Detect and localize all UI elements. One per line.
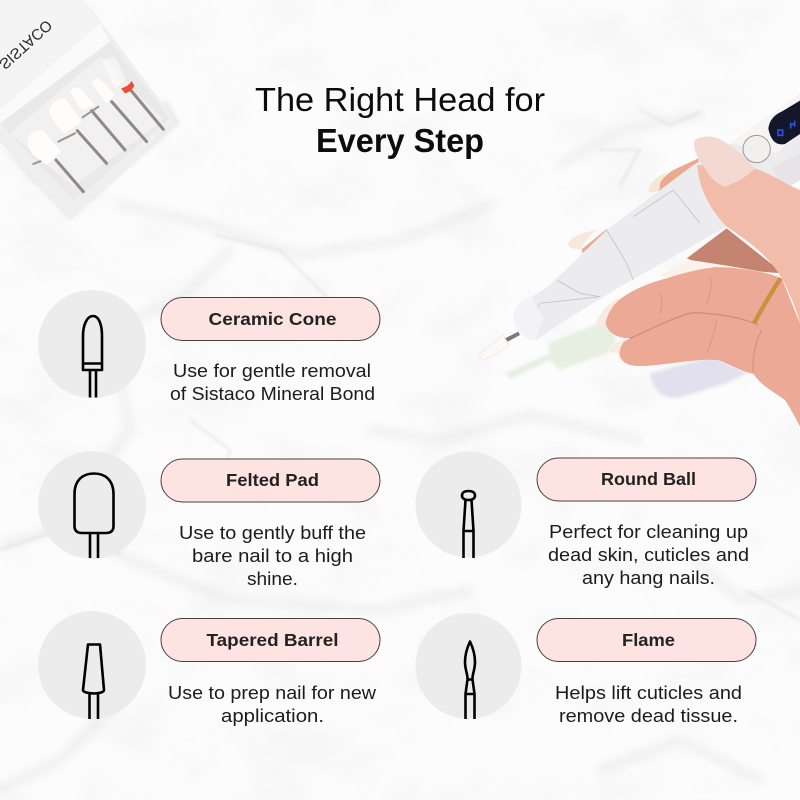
product case with drill bits — [0, 0, 180, 220]
description: Use for gentle removal — [173, 360, 371, 381]
knuckle creases — [630, 277, 762, 373]
description: Helps lift cuticles and — [555, 682, 742, 703]
description: dead skin, cuticles and — [548, 544, 749, 565]
cast shadows — [505, 320, 747, 398]
description: application. — [221, 705, 324, 726]
item: Felted Pad — [38, 451, 380, 589]
finger nails — [595, 297, 622, 327]
thumb nail — [694, 136, 755, 187]
description: Perfect for cleaning up — [549, 521, 748, 542]
fingers and back of hand — [605, 267, 800, 427]
pill: Felted Pad — [161, 459, 380, 502]
pill: Ceramic Cone: Ceramic Cone — [208, 309, 337, 329]
icon: round ball — [416, 452, 522, 558]
description: any hang nails. — [582, 567, 715, 588]
description: shine. — [247, 568, 298, 589]
icon: felted pad — [38, 451, 146, 559]
back fingers — [657, 158, 702, 192]
description: Use to prep nail for new — [168, 682, 377, 703]
wedding ring — [754, 278, 781, 323]
icon: ceramic cone — [38, 290, 146, 398]
pill: Flame: Flame — [622, 630, 675, 650]
red tipped bit — [121, 81, 134, 93]
item: Tapered Barrel — [38, 611, 380, 726]
item: Flame — [416, 613, 756, 726]
pen button — [743, 135, 770, 163]
pill: Tapered Barrel: Tapered Barrel — [206, 630, 338, 650]
description: Use to gently buff the — [179, 522, 366, 543]
pill: Flame — [537, 618, 756, 662]
case body — [0, 0, 175, 217]
description — [555, 682, 742, 726]
pill: Tapered Barrel — [161, 618, 380, 662]
description — [170, 360, 375, 404]
palm shadow — [687, 228, 783, 273]
pill: Felted Pad: Felted Pad — [226, 470, 319, 490]
icon: flame — [416, 613, 522, 719]
white bit heads — [28, 57, 126, 165]
case shadow — [0, 100, 180, 220]
description — [548, 521, 749, 588]
pen body — [513, 93, 800, 340]
thumb — [697, 165, 800, 323]
description: of Sistaco Mineral Bond — [170, 383, 375, 404]
icon: tapered barrel — [38, 611, 146, 719]
title: The Right Head for — [255, 81, 545, 118]
pill: Ceramic Cone — [161, 298, 380, 340]
drill bit — [505, 332, 520, 342]
description — [168, 682, 377, 726]
hand holding nail drill pen — [478, 93, 800, 427]
pen nose — [513, 297, 543, 340]
bit shafts — [56, 90, 163, 192]
pill: Round Ball: Round Ball — [601, 469, 696, 489]
pill: Round Ball — [537, 458, 756, 501]
title — [255, 81, 545, 159]
description: remove dead tissue. — [559, 705, 738, 726]
item: Round Ball — [416, 452, 756, 588]
description — [179, 522, 366, 589]
description: bare nail to a high — [192, 545, 353, 566]
title: Every Step — [316, 122, 484, 159]
cord strip — [660, 260, 778, 281]
item: Ceramic Cone — [38, 290, 380, 404]
pen display — [768, 101, 800, 144]
